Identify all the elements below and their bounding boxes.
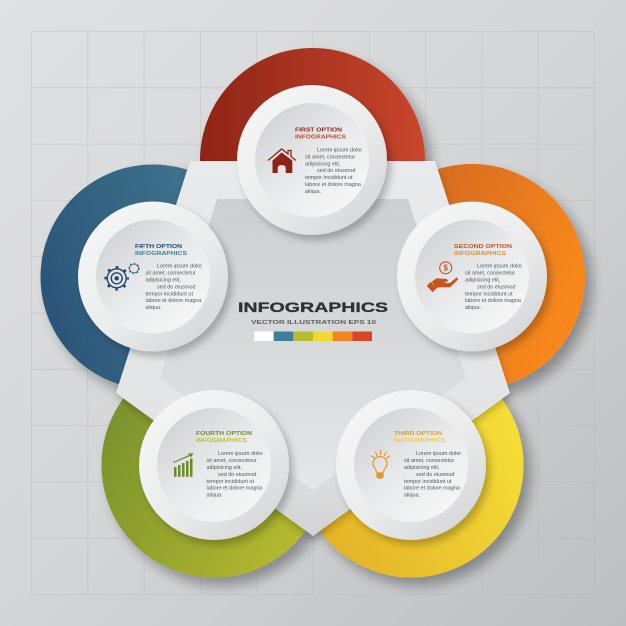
panel: first option <box>237 85 387 235</box>
panel: second option <box>397 202 547 352</box>
body text: sit amet, consectetur <box>465 271 515 277</box>
body text: labore et dolore magna <box>465 298 522 304</box>
title: INFOGRAPHICS <box>238 299 388 315</box>
heading: THIRD OPTION <box>394 431 442 437</box>
inner pentagon <box>160 199 466 490</box>
body text: adipisicing elit, <box>305 161 341 167</box>
body text: labore et dolore magna <box>305 182 362 188</box>
body text: tempor incididunt ut <box>146 291 193 297</box>
body text: sed do eiusmod <box>317 168 355 174</box>
body text: sed do eiusmod <box>218 472 256 478</box>
heading: FIFTH OPTION <box>135 244 182 250</box>
outer ring: second option orange <box>359 164 585 390</box>
body text: sit amet, consectetur <box>146 271 196 277</box>
body text: tempor incididunt ut <box>404 479 452 485</box>
subheading: INFOGRAPHICS <box>394 438 446 444</box>
body text: labore et dolore magna <box>146 298 202 304</box>
body text: Lorem ipsum dolor <box>157 264 202 270</box>
outer ring: fifth option blue <box>40 164 266 390</box>
heading: SECOND OPTION <box>454 244 512 250</box>
body text: adipisicing elit, <box>206 465 242 471</box>
outer ring: fourth option green <box>102 352 326 578</box>
body text: aliqua. <box>305 189 322 195</box>
heading: FIRST OPTION <box>295 128 342 134</box>
icon: light bulb <box>372 450 390 478</box>
body text: sit amet, consectetur <box>404 458 454 464</box>
icon: gears <box>106 263 139 289</box>
body text: tempor incididunt ut <box>206 479 254 485</box>
body text: sed do eiusmod <box>157 284 195 290</box>
body text: Lorem ipsum dolor <box>218 451 263 457</box>
body text: tempor incididunt ut <box>465 291 513 297</box>
body text: aliqua. <box>404 493 421 499</box>
subheading: INFOGRAPHICS <box>135 251 188 257</box>
body text: labore et dolore magna <box>404 486 461 492</box>
panel: third option <box>336 390 486 540</box>
icon: hand with coin <box>427 262 458 292</box>
body text: aliqua. <box>146 305 162 311</box>
body text: adipisicing elit, <box>465 278 501 284</box>
subheading: INFOGRAPHICS <box>295 135 347 141</box>
icon: hand with coin: $ <box>443 264 448 273</box>
body text: aliqua. <box>206 493 223 499</box>
subheading: INFOGRAPHICS <box>196 438 248 444</box>
heading: FOURTH OPTION <box>196 431 252 437</box>
body text: sit amet, consectetur <box>305 154 355 160</box>
body text: sit amet, consectetur <box>206 458 257 464</box>
icon: bar chart with arrow <box>173 453 194 477</box>
outer ring: third option yellow <box>298 352 524 578</box>
outer ring: first option red <box>200 48 425 273</box>
subtitle: VECTOR ILLUSTRATION EPS 10 <box>251 320 376 326</box>
body text: Lorem ipsum dolor <box>317 148 362 154</box>
body text: sed do eiusmod <box>416 472 454 478</box>
body text: tempor incididunt ut <box>305 175 353 181</box>
body text: Lorem ipsum dolor <box>477 264 522 270</box>
body text: sed do eiusmod <box>477 284 515 290</box>
body text: Lorem ipsum dolor <box>416 451 461 457</box>
panel: fifth option <box>78 202 228 352</box>
colour bar <box>254 332 372 341</box>
icon: house <box>268 149 296 173</box>
center title block <box>238 299 388 341</box>
body text: adipisicing elit, <box>146 278 181 284</box>
panel: fourth option <box>139 390 289 540</box>
body text: aliqua. <box>465 305 482 311</box>
body text: labore et dolore magna <box>206 486 263 492</box>
body text: adipisicing elit, <box>404 465 440 471</box>
subheading: INFOGRAPHICS <box>454 251 507 257</box>
outer pentagon <box>116 161 510 536</box>
